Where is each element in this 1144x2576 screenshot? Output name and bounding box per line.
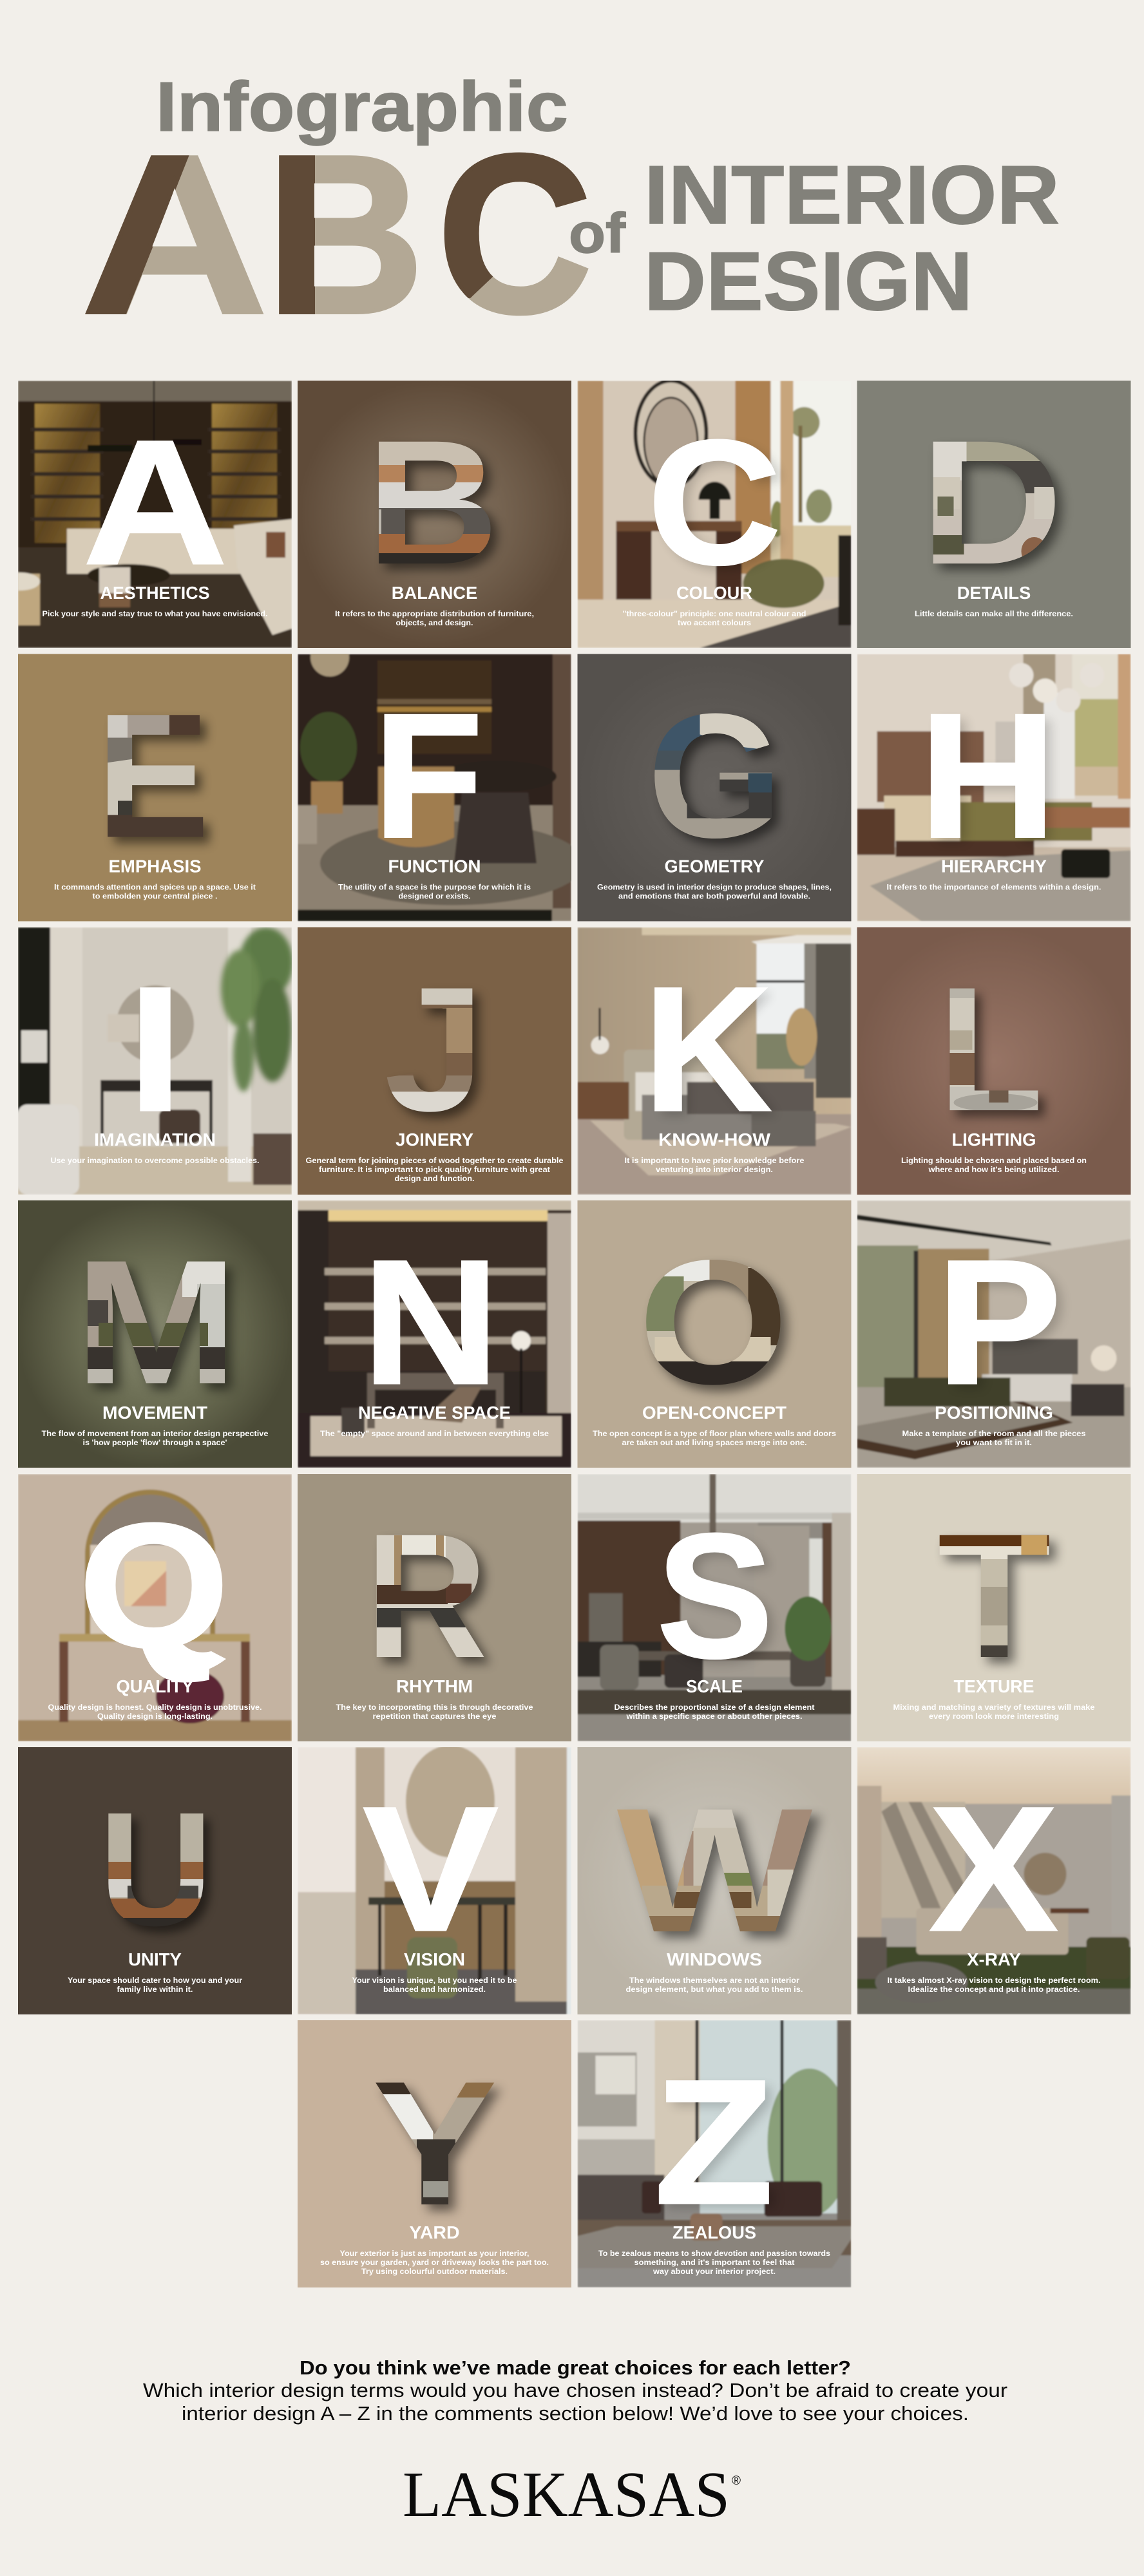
background	[857, 381, 1131, 648]
panel: X X-ray	[857, 1747, 1131, 2014]
term: JOINERY	[396, 1130, 473, 1150]
description	[41, 1430, 269, 1447]
background	[857, 927, 1131, 1195]
letter X: X	[930, 1770, 1059, 1967]
letter K: K	[644, 951, 772, 1148]
description	[615, 1703, 815, 1721]
description: Try using colourful outdoor materials.	[361, 2268, 508, 2276]
title	[85, 79, 1059, 316]
description: so ensure your garden, yard or driveway looks the part too.	[320, 2259, 549, 2267]
photo: living room with striped shadow wall	[857, 1747, 1131, 2014]
term: DETAILS	[957, 583, 1031, 603]
panel: M Movement	[18, 1200, 292, 1468]
description	[336, 1703, 533, 1721]
description	[902, 1430, 1086, 1447]
heading letters: ABC: C	[437, 108, 592, 360]
description: The key to incorporating this is through decorative	[336, 1703, 533, 1712]
heading: of: of	[569, 202, 626, 265]
logo: LASKASAS: LASKASAS	[403, 2458, 730, 2530]
letter N: N	[362, 1224, 499, 1421]
photo: entry with mirror and plant	[18, 927, 293, 1195]
letter shadow: E	[102, 684, 216, 882]
description: two accent colours	[678, 619, 751, 627]
letter shadow: Y	[379, 2050, 504, 2248]
description: It takes almost X-ray vision to design the perfect room.	[888, 1976, 1100, 1985]
term: BALANCE	[392, 583, 477, 603]
letter O filled with lounge photo	[642, 1255, 787, 1387]
term: MOVEMENT	[102, 1403, 207, 1423]
description: The utility of a space is the purpose for which it is	[338, 884, 531, 891]
description: something, and it's important to feel that	[634, 2259, 795, 2267]
letter shadow: K	[650, 956, 778, 1153]
photo: dining room with tall windows	[577, 2020, 852, 2287]
heading letters: ABC: C	[437, 108, 592, 360]
description: is 'how people 'flow' through a space'	[82, 1439, 227, 1447]
photo: dining room	[577, 1474, 852, 1741]
background	[298, 2020, 571, 2287]
term: NEGATIVE SPACE	[358, 1403, 511, 1423]
description: and emotions that are both powerful and lovable.	[618, 893, 810, 900]
description: designed or exists.	[398, 893, 470, 900]
panel: R Rhythm	[298, 1474, 571, 1741]
letter shadow: W	[625, 1778, 822, 1976]
closing question text	[143, 2356, 1007, 2425]
letter shadow: P	[943, 1228, 1068, 1426]
term: YARD	[410, 2222, 460, 2242]
description	[888, 1976, 1100, 1994]
description: Idealize the concept and put it into practice.	[908, 1985, 1080, 1994]
logo: LASKASAS: ®	[732, 2474, 741, 2488]
letter W filled with bedroom photo	[609, 1805, 822, 1934]
term: POSITIONING	[935, 1403, 1053, 1423]
term: IMAGINATION	[94, 1130, 216, 1150]
background	[857, 1474, 1131, 1741]
letter L filled with dining photo	[944, 985, 1044, 1114]
description: furniture. It is important to pick quality furniture with great	[319, 1166, 550, 1174]
panel: O Open-concept	[577, 1200, 852, 1468]
panel: Z Zealous	[577, 2020, 852, 2287]
letter shadow: O	[645, 1229, 795, 1427]
background	[298, 1474, 571, 1741]
description	[338, 884, 531, 900]
description: To be zealous means to show devotion and passion towards	[598, 2249, 830, 2258]
term: ZEALOUS	[672, 2222, 756, 2242]
description	[626, 1976, 803, 1994]
term: VISION	[404, 1949, 465, 1969]
description: It refers to the appropriate distribution of furniture,	[335, 610, 534, 618]
term: EMPHASIS	[108, 857, 201, 876]
letter E filled with room photo	[108, 715, 204, 837]
letter Z: Z	[654, 2043, 774, 2241]
background	[577, 1747, 852, 2014]
description: It commands attention and spices up a space. Use it	[54, 884, 256, 891]
panel: C Colour	[577, 379, 852, 648]
letter C: C	[647, 403, 781, 601]
description: are taken out and living spaces merge into one.	[622, 1439, 806, 1447]
term: OPEN-CONCEPT	[642, 1403, 786, 1423]
letter shadow: T	[944, 1503, 1058, 1701]
letter B filled with bedroom photo	[379, 442, 491, 564]
photo: bedroom with terrazzo wall	[857, 1200, 1131, 1468]
description: Mixing and matching a variety of textures will make	[893, 1703, 1095, 1712]
panel: V Vision	[298, 1745, 571, 2014]
panel: A Aesthetics	[1, 381, 292, 648]
photo: dark living room with backlit shelves	[1, 381, 292, 648]
heading: DESIGN: DESIGN	[644, 235, 973, 328]
description: venturing into interior design.	[656, 1166, 773, 1174]
letter P: P	[937, 1223, 1062, 1421]
description: way about your interior project.	[653, 2268, 776, 2276]
panel: U Unity	[18, 1747, 292, 2014]
letter shadow: J	[390, 956, 491, 1154]
description: family live within it.	[117, 1985, 193, 1994]
background	[18, 1200, 292, 1468]
description	[598, 2249, 830, 2276]
description: to embolden your central piece .	[93, 893, 218, 900]
description: Describes the proportional size of a design element	[615, 1703, 815, 1712]
description: objects, and design.	[396, 619, 473, 627]
description: General term for joining pieces of wood together to create durable	[305, 1157, 564, 1165]
description: It is important to have prior knowledge before	[625, 1157, 805, 1165]
description: The flow of movement from an interior design perspective	[41, 1430, 269, 1438]
photo: dark office with stone shelves	[298, 1200, 571, 1468]
panel: I Imagination	[18, 927, 293, 1195]
description	[68, 1976, 243, 1994]
description: The "empty" space around and in between everything else	[320, 1430, 549, 1438]
description: It refers to the importance of elements within a design.	[886, 884, 1101, 891]
description	[352, 1976, 517, 1994]
description: Little details can make all the difference.	[915, 610, 1073, 618]
description: Quality design is long-lasting.	[97, 1712, 213, 1721]
letter Q with tail: Q	[79, 1487, 229, 1685]
heading letters: ABC: A	[82, 108, 267, 361]
letter shadow: C	[654, 408, 788, 607]
description: Your space should cater to how you and your	[68, 1976, 243, 1985]
term: SCALE	[686, 1676, 743, 1696]
letter T filled with textile photo	[934, 1532, 1054, 1661]
term: X-RAY	[967, 1949, 1021, 1969]
letter A: A	[83, 404, 227, 601]
description	[901, 1157, 1087, 1174]
background	[577, 654, 852, 921]
description: Make a template of the room and all the pieces	[902, 1430, 1086, 1438]
description: Pick your style and stay true to what you have envisioned.	[43, 610, 268, 618]
panel: K Know-how	[577, 927, 852, 1195]
term: LIGHTING	[952, 1130, 1036, 1150]
description: you want to fit in it.	[956, 1439, 1032, 1447]
heading letters: ABC: B	[266, 109, 424, 361]
panel: W Windows	[577, 1747, 852, 2014]
description	[597, 884, 832, 900]
letter shadow: L	[945, 957, 1050, 1155]
photo: mirror and console between curtains	[298, 1745, 571, 2014]
term: QUALITY	[116, 1676, 193, 1696]
description	[48, 1703, 262, 1721]
background	[18, 654, 292, 921]
letter R filled with office photo	[372, 1531, 491, 1660]
panel: D Details	[857, 381, 1131, 648]
term: RHYTHM	[396, 1676, 473, 1696]
letter D filled with dining room photo	[933, 442, 1055, 564]
background	[298, 927, 571, 1195]
term: COLOUR	[676, 583, 752, 603]
description: within a specific space or about other pieces.	[625, 1712, 803, 1721]
panel: G Geometry	[577, 654, 852, 921]
description	[320, 2249, 549, 2276]
letter shadow: H	[926, 683, 1063, 880]
description	[593, 1430, 836, 1447]
heading letters: ABC	[85, 152, 589, 316]
closing question text: Do you think we’ve made great choices for each letter?	[300, 2356, 851, 2379]
description	[54, 884, 256, 900]
letter F: F	[373, 676, 483, 875]
background	[298, 381, 571, 648]
description: Lighting should be chosen and placed based on	[901, 1157, 1087, 1165]
heading: INTERIOR: INTERIOR	[644, 149, 1060, 242]
panel: J Joinery	[298, 927, 571, 1195]
panel: L Lighting	[857, 927, 1131, 1195]
letter I: I	[128, 950, 182, 1148]
closing question text: interior design A – Z in the comments section below! We’d love to see your choices.	[182, 2402, 969, 2425]
background	[18, 1747, 292, 2014]
description: "three-colour" principle: one neutral colour and	[622, 610, 806, 618]
description: Quality design is honest. Quality design is unobtrusive.	[48, 1703, 262, 1712]
panel: P Positioning	[857, 1200, 1131, 1468]
description: Your exterior is just as important as your interior,	[340, 2249, 529, 2258]
letter U filled with bedroom photo	[102, 1808, 211, 1931]
letter Y filled with office photo	[368, 2078, 500, 2207]
description: Geometry is used in interior design to produce shapes, lines,	[597, 884, 832, 891]
panel: E Emphasis	[18, 654, 292, 921]
panel: N Negative space	[298, 1200, 571, 1468]
panel: Q Quality	[18, 1474, 292, 1741]
panel: B Balance	[298, 381, 571, 648]
term: UNITY	[128, 1949, 182, 1969]
description: design element, but what you add to them is.	[626, 1985, 803, 1994]
heading letters: ABC: B	[266, 109, 424, 361]
panel: H Hierarchy	[857, 654, 1131, 921]
term: KNOW-HOW	[658, 1130, 770, 1150]
term: TEXTURE	[953, 1676, 1034, 1696]
letter H: H	[919, 677, 1056, 875]
heading letters: ABC: A	[82, 108, 267, 361]
description	[305, 1157, 564, 1183]
photo: concrete bedroom	[577, 927, 852, 1195]
description	[622, 610, 806, 627]
term: AESTHETICS	[100, 583, 210, 603]
background	[577, 1200, 852, 1468]
term: HIERARCHY	[941, 857, 1047, 876]
letter shadow: B	[373, 410, 505, 608]
description: every room look more interesting	[929, 1712, 1059, 1721]
description: Use your imagination to overcome possible obstacles.	[50, 1157, 259, 1165]
letter shadow: G	[654, 683, 789, 881]
description: repetition that captures the eye	[372, 1712, 497, 1721]
letter shadow: M	[81, 1229, 244, 1428]
description: The windows themselves are not an interior	[629, 1976, 800, 1985]
photo: console by a window with palms	[577, 379, 852, 648]
description	[335, 610, 534, 627]
letter M filled with dining photo	[82, 1258, 231, 1387]
heading: Infographic: Infographic	[156, 68, 568, 146]
description: where and how it's being utilized.	[928, 1166, 1060, 1174]
description: balanced and harmonized.	[383, 1985, 486, 1994]
letter shadow: Z	[660, 2049, 780, 2246]
letter S: S	[657, 1497, 773, 1694]
description: design and function.	[394, 1175, 474, 1183]
letter J filled with joinery photo	[381, 985, 478, 1114]
description	[625, 1157, 805, 1174]
panel: Y Yard	[298, 2020, 571, 2287]
letter shadow: D	[926, 410, 1070, 607]
letter G filled with sofa photo	[654, 714, 772, 838]
letter shadow: S	[663, 1502, 779, 1700]
description	[893, 1703, 1095, 1721]
term: FUNCTION	[388, 857, 481, 876]
letter shadow: U	[106, 1785, 219, 1966]
term: GEOMETRY	[665, 857, 764, 876]
description: Your vision is unique, but you need it to be	[352, 1976, 517, 1985]
photo: console with arched mirror	[18, 1474, 292, 1741]
letter shadow: R	[372, 1503, 494, 1701]
panel: T Texture	[857, 1474, 1131, 1741]
letter V: V	[363, 1770, 499, 1968]
photo: bright bedroom	[857, 654, 1131, 921]
panel: F Function	[298, 638, 584, 921]
closing question text: Which interior design terms would you have chosen instead? Don’t be afraid to create your	[143, 2379, 1007, 2401]
description: The open concept is a type of floor plan where walls and doors	[593, 1430, 836, 1438]
photo: dark dining room	[298, 638, 584, 921]
panel: S Scale	[577, 1474, 852, 1741]
term: WINDOWS	[667, 1949, 762, 1969]
